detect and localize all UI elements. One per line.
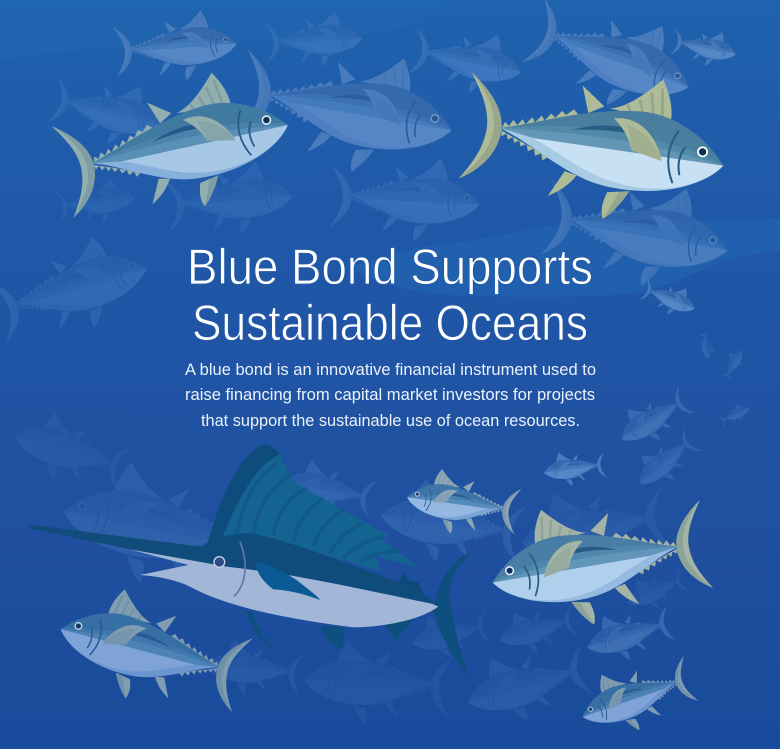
- fish: faint top right center: [406, 18, 528, 102]
- sail stripes: [237, 463, 400, 562]
- fish: behind sail: [278, 456, 379, 523]
- fish: behind small tuna: [376, 474, 529, 572]
- tuna: large lower right: [481, 480, 719, 642]
- fish: upper left small: [112, 9, 238, 84]
- fish: upper right: [516, 0, 706, 130]
- fish: faint lower: [494, 597, 581, 661]
- tuna: small lower right: [571, 646, 703, 747]
- tuna: top left foreground: [47, 60, 300, 232]
- light water bands: [0, 0, 780, 297]
- pectoral fin: [256, 563, 320, 600]
- tuna: small middle right: [404, 466, 523, 541]
- second dorsal fin: [398, 573, 428, 602]
- description text: [185, 361, 596, 430]
- fish: behind large tuna: [514, 473, 675, 583]
- fish: far left large: [0, 225, 158, 352]
- fish: centre: [326, 151, 483, 246]
- rear fins: [246, 610, 413, 652]
- fish: faint right of large tuna: [620, 562, 692, 619]
- sailfish: [28, 444, 472, 678]
- sailfish tail: [433, 552, 472, 678]
- fish: right tiny: [717, 346, 749, 383]
- description text: that support the sustainable use of ocean resources.: [201, 412, 580, 430]
- sailfish eye: [214, 557, 225, 567]
- fish: facing left right lower: [627, 423, 705, 498]
- fish: top right small: [669, 22, 740, 72]
- description text: A blue bond is an innovative financial instrument used to: [185, 361, 596, 379]
- tuna: top right foreground: [452, 48, 736, 237]
- fish: facing left right side: [610, 380, 698, 457]
- fish: faint mid left: [7, 404, 136, 498]
- sail: [223, 454, 418, 572]
- fish: small right lower: [580, 598, 679, 671]
- fish: faint left lower: [54, 175, 137, 228]
- sailfish belly: [130, 549, 438, 627]
- fish: faint mid: [163, 159, 295, 239]
- fish: right: [535, 163, 737, 301]
- sailfish back and bill: [28, 524, 438, 605]
- fish: faint lower left: [203, 637, 305, 700]
- fish: faint lower far: [407, 604, 494, 664]
- fish: right small: [637, 273, 701, 323]
- fish: faint lower centre: [303, 638, 454, 726]
- fish: faint upper left: [44, 66, 170, 156]
- fish: faint top center: [264, 11, 363, 69]
- fish: faint lower mid: [458, 633, 598, 735]
- title: Blue Bond Supports: [187, 239, 593, 295]
- fish: large central: [228, 29, 463, 189]
- sail dark leading edge: [207, 444, 280, 547]
- fish: behind sailfish: [54, 453, 280, 604]
- fish: right tiny 2: [716, 400, 753, 430]
- title: [187, 239, 593, 351]
- fish: right tiny group: [696, 330, 716, 361]
- tuna: lower left: [49, 577, 257, 724]
- fish: small facing left: [541, 446, 608, 490]
- description text: raise financing from capital market investors for projects: [185, 386, 595, 404]
- gill: [234, 542, 245, 597]
- title: Sustainable Oceans: [192, 295, 588, 351]
